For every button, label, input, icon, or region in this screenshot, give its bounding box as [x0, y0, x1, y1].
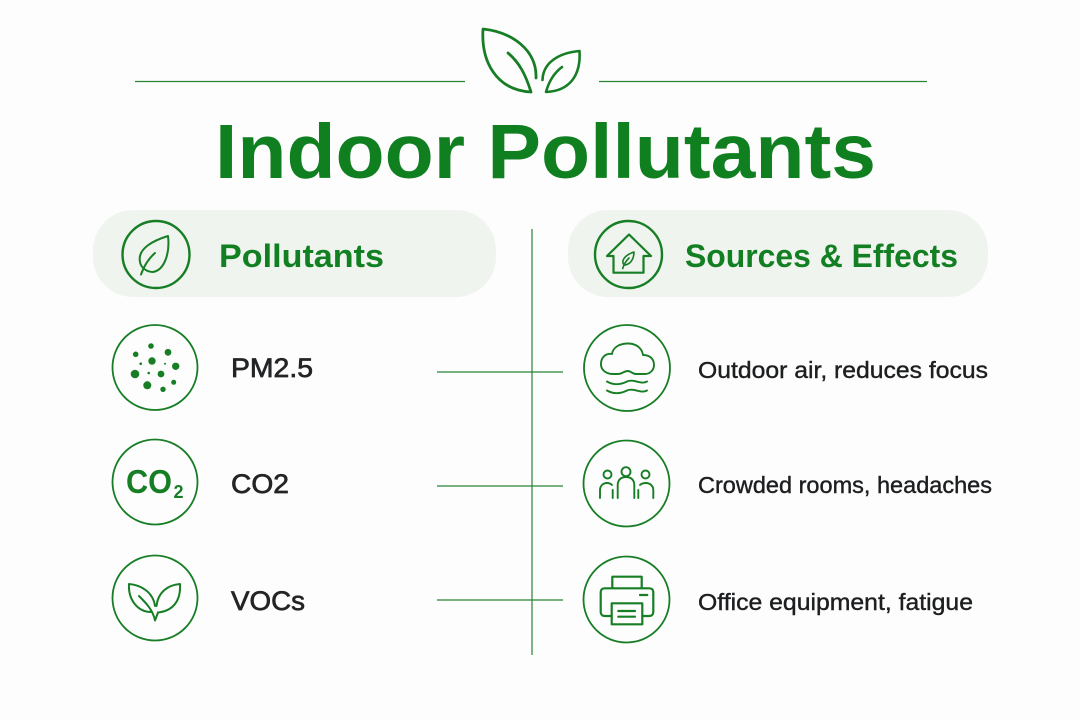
row: outdoor air: Outdoor air, reduces focus — [698, 357, 988, 383]
row: PM2.5 — [112, 325, 313, 410]
center divider — [531, 229, 533, 655]
row: PM2.5: PM2.5 — [231, 353, 313, 383]
panel: sources and effects column — [568, 210, 992, 642]
connector lines — [437, 372, 563, 600]
heading: sources and effects pill: Sources & Effects — [685, 238, 958, 274]
row: crowded rooms: Crowded rooms, headaches — [698, 472, 992, 498]
heading: pollutants pill — [93, 210, 496, 297]
row: CO2: 2 — [174, 482, 184, 502]
row: office equipment: Office equipment, fatigue — [698, 589, 973, 615]
panel: pollutants column — [93, 210, 496, 640]
title: Indoor Pollutants — [215, 109, 876, 195]
heading: sources and effects pill — [568, 210, 988, 297]
row: VOCs — [112, 556, 305, 640]
heading: pollutants pill: Pollutants — [219, 238, 384, 274]
row: crowded rooms — [584, 440, 992, 526]
row: VOCs: VOCs — [231, 586, 305, 616]
row: CO2: CO — [126, 463, 172, 500]
row: CO2 — [112, 440, 289, 524]
icon: header leaves with rules — [135, 29, 927, 92]
row: outdoor air — [584, 325, 988, 411]
row: office equipment — [584, 556, 973, 642]
row: CO2: CO2 — [231, 469, 289, 499]
